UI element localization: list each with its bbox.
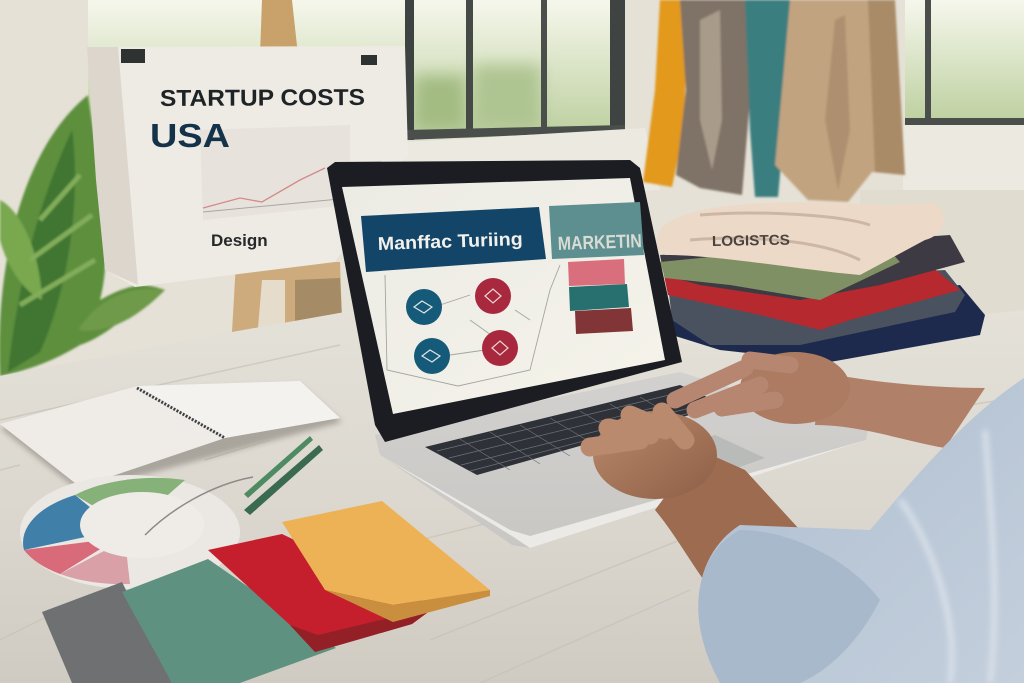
left window [88,0,660,200]
marketing banner [549,202,644,259]
hand on trackpad [590,411,717,499]
pens [205,436,323,515]
desk [0,310,1024,683]
icon: teal circle bottom [414,338,450,374]
keyboard [425,385,725,475]
notebook [0,381,342,492]
easel [232,0,342,332]
laptop [327,160,868,548]
right window [860,0,1024,315]
board heading: USA: USA [150,117,230,154]
colour bars [568,259,633,334]
icon: teal circle top [406,289,442,325]
board heading: startup costs: STARTUP COSTS [160,84,365,111]
manufacturing banner [361,207,546,272]
manufacturing banner: Manffac Turiing [377,228,523,254]
marketing banner: MARKETIN [557,231,642,255]
presentation board [87,46,408,287]
upper forearm [815,372,985,448]
hanging fabrics [643,0,905,202]
laptop base [375,372,868,548]
board line chart [200,125,350,220]
swatch: yellow [282,501,490,605]
board label: design: Design [211,231,268,250]
icon: red circle bottom [482,330,518,366]
fabric swatches [42,501,490,683]
back wall [0,0,1024,380]
swatch: green [122,559,336,683]
laptop screen bezel [327,160,682,442]
shirt sleeve [698,378,1024,683]
hand on keyboard [675,352,850,424]
folded fabric stack [657,202,985,362]
swatch: grey [42,582,172,683]
potted plant [0,95,165,376]
colour wheel [20,475,253,589]
forearm under lower hand [655,450,800,600]
fabric stack label: logistics: LOGISTCS [712,233,790,250]
icon: red circle top [475,278,511,314]
trackpad [620,435,765,490]
laptop screen [342,178,665,414]
swatch: red [208,534,435,652]
flow diagram [385,265,560,386]
